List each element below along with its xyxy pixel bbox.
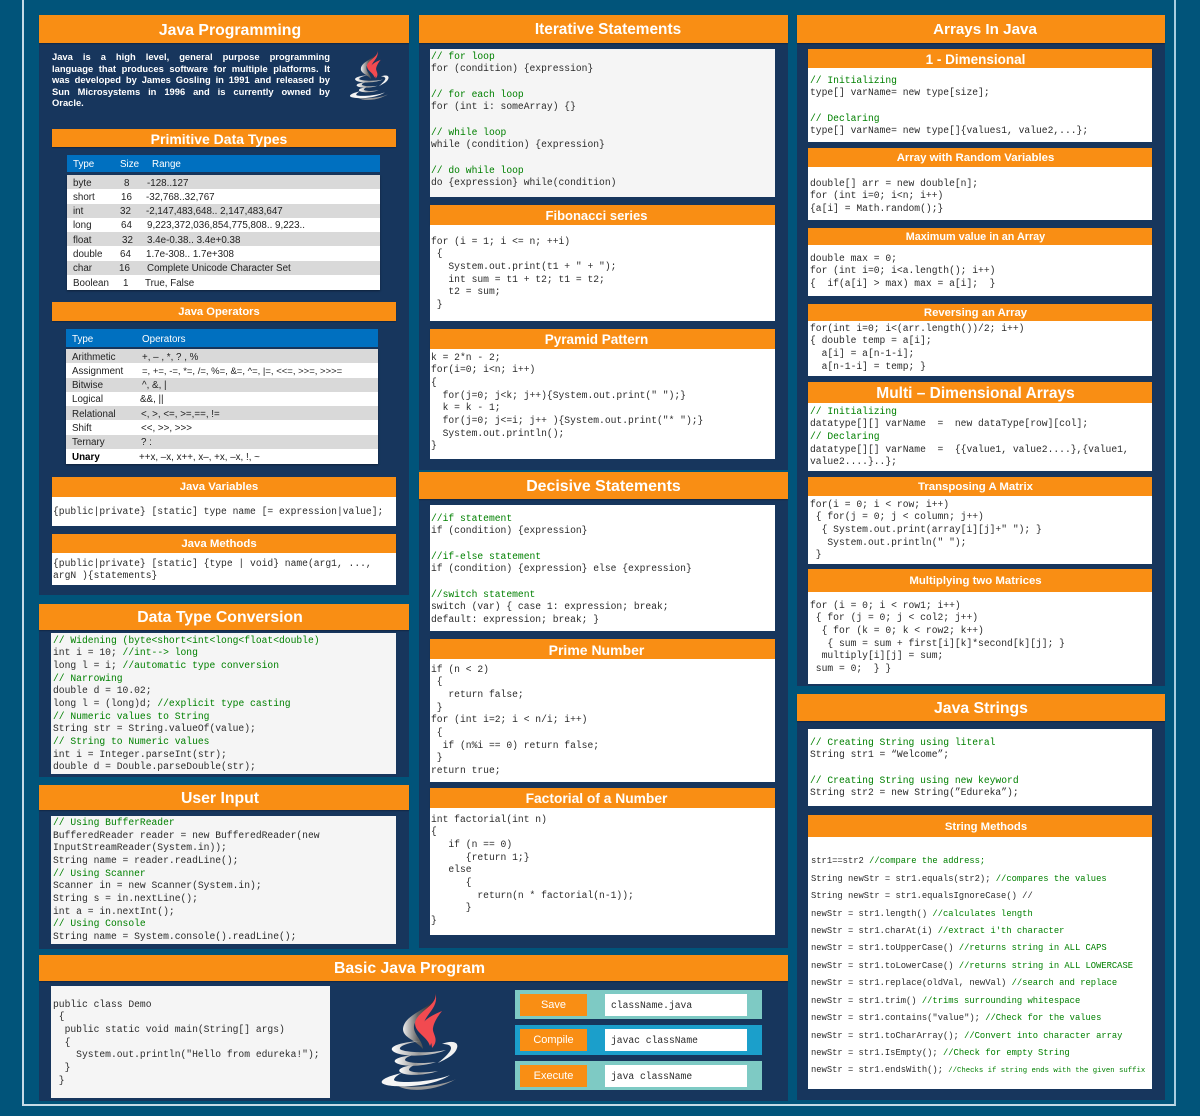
code: variables: {public|private} [static] type name [= expression|value]; (53, 506, 383, 516)
section: Multi – Dimensional Arrays (808, 382, 1152, 471)
code: user input: // Using BufferReader BufferedReader reader = new BufferedReader(new InputStreamReader(System.in)); String name = reader.readLine(); // Using Scanner Scanner in = new Scanner(System.in); String s = in.nextLine(); int a = in.nextInt(); // Using Console String name = System.console().readLine(); (53, 817, 320, 942)
command: execute: java className (611, 1071, 692, 1082)
code: transposing: for(i = 0; i < row; i++) { for(j = 0; j < column; j++) { System.out.print(array[i][j]+" "); } System.out.println(" "); } (810, 499, 1042, 560)
table: data types: Boolean (73, 278, 109, 289)
command: compile: javac className (611, 1035, 698, 1046)
table header: data types (67, 155, 380, 172)
table header: operators (66, 329, 378, 347)
code: methods: {public|private} [static] {type | void} name(arg1, ..., argN ){statements} (53, 558, 372, 581)
code: pyramid: k = 2*n - 2; for(i=0; i<n; i++) { for(j=0; j<k; j++){System.out.print(" ");} k = k - 1; for(j=0; j<=i; j++ ){System.out.print("* ");} System.out.println(); } (431, 352, 703, 451)
table: data types: 32 (120, 206, 131, 217)
heading: Basic Java Program (39, 955, 788, 981)
text block: introduction: Oracle. (52, 97, 84, 108)
button: Compile (520, 1029, 587, 1051)
row: Compile (515, 1025, 762, 1055)
panel: Decisive Statements (419, 472, 788, 948)
code: reversing: for(int i=0; i<(arr.length())/2; i++) { double temp = a[i]; a[i] = a[n-1-i]; a[n-1-i] = temp; } (810, 323, 1024, 372)
heading: Basic Java Program: Basic Java Program (334, 960, 485, 977)
heading: Multiplying two Matrices: Multiplying two Matrices (909, 575, 1042, 587)
section: Pyramid Pattern (430, 329, 775, 459)
section: Factorial of a Number (430, 788, 775, 935)
panel: Arrays In Java (797, 15, 1165, 686)
table: operators (66, 349, 378, 464)
heading: Iterative Statements: Iterative Statements (535, 21, 681, 38)
code: maximum: double max = 0; for (int i=0; i<a.length(); i++) { if(a[i] > max) max = a[i]; } (810, 253, 995, 289)
table: operators: <<, >>, >>> (141, 423, 192, 434)
section: Fibonacci series (430, 205, 775, 321)
heading: Java Operators: Java Operators (178, 306, 260, 318)
section: Primitive Data Types (52, 129, 396, 292)
text block: introduction: language that produces software for multiple platforms. It (52, 63, 330, 74)
code: random (808, 167, 1152, 220)
code: multiplying (808, 592, 1152, 684)
heading: Java Methods (52, 534, 396, 553)
code: string methods: str1==str2 //compare the address; String newStr = str1.equals(str2); //compares the values String newStr = str1.equalsIgnoreCase() // newStr = str1.length() //calculates length newStr = str1.charAt(i) //extract i'th character newStr = str1.toUpperCase() //returns string in ALL CAPS newStr = str1.toLowerCase() //returns string in ALL LOWERCASE newStr = str1.replace(oldVal, newVal) //search and replace newStr = str1.trim() //trims surrounding whitespace newStr = str1.contains("value"); //Check for the values newStr = str1.toCharArray(); //Convert into character array newStr = str1.IsEmpty(); //Check for empty String newStr = str1.endsWith(); //Checks if string ends with the given suffix (811, 856, 1145, 1075)
text block: introduction (52, 51, 330, 108)
table: operators: ? : (141, 437, 152, 448)
code: prime (430, 659, 775, 782)
table: data types: 64 (120, 249, 131, 260)
button: Execute: Execute (534, 1070, 573, 1082)
command: save: className.java (611, 1000, 692, 1011)
table header: operators: Type (72, 334, 93, 344)
heading: Transposing A Matrix: Transposing A Matrix (918, 481, 1033, 493)
panel: Java Programming (39, 15, 409, 595)
text block: introduction: was developed by James Gosling in 1991 and released by (52, 74, 330, 85)
table: data types: True, False (145, 278, 194, 289)
code: methods (52, 553, 396, 585)
button: Compile: Compile (533, 1034, 574, 1046)
table header: data types: Range (152, 159, 181, 170)
table: data types: -128..127 (147, 178, 188, 188)
table: data types: 8 (124, 178, 129, 188)
code: loops (430, 49, 775, 197)
section: Array with Random Variables (808, 148, 1152, 220)
table: operators: Relational (72, 409, 116, 420)
heading: String Methods: String Methods (945, 821, 1027, 833)
code: transposing (808, 496, 1152, 564)
table: data types: 64 (121, 220, 132, 231)
heading: Maximum value in an Array: Maximum value in an Array (906, 231, 1045, 243)
icon: large java logo (382, 994, 458, 1090)
code: conditionals (430, 505, 775, 631)
table: data types: float (73, 235, 92, 246)
row: Execute (515, 1061, 762, 1090)
button: Execute (520, 1065, 587, 1087)
table: data types (67, 175, 380, 290)
table: data types: 3.4e-0.38.. 3.4e+0.38 (147, 235, 240, 246)
heading: Java Programming (39, 15, 409, 43)
text block: introduction: Sun Microsystems in 1996 and is currently owned by (52, 86, 330, 97)
code: demo program: public class Demo { public static void main(String[] args) { System.out.println("Hello from edureka!"); } } (53, 999, 320, 1086)
table: operators: Arithmetic (72, 352, 116, 362)
table: operators: Bitwise (72, 380, 103, 391)
heading: Java Methods: Java Methods (181, 538, 257, 550)
code: conditionals: //if statement if (condition) {expression} //if-else statement if (condition) {expression} else {expression} //switch statement switch (var) { case 1: expression; break; default: expression; break; } (431, 513, 692, 625)
heading: User Input: User Input (181, 790, 259, 807)
section: Java Methods (52, 534, 396, 585)
table: data types: double (73, 249, 102, 260)
panel: Java Strings (797, 694, 1165, 1100)
table: data types: byte (73, 178, 92, 188)
code: random: double[] arr = new double[n]; for (int i=0; i<n; i++) {a[i] = Math.random();} (810, 178, 978, 214)
heading: Array with Random Variables (808, 148, 1152, 167)
code: creating strings: // Creating String using literal String str1 = “Welcome”; // Creating String using new keyword String str2 = new String(”Edureka”); (810, 737, 1019, 798)
heading: Java Strings: Java Strings (934, 700, 1028, 717)
command: compile (605, 1029, 747, 1051)
code: one-dimensional: // Initializing type[] varName= new type[size]; // Declaring type[] varName= new type[]{values1, value2,...}; (810, 75, 1088, 136)
table: data types: char (73, 263, 92, 274)
table: operators: +, – , *, ? , % (142, 352, 198, 362)
heading: Java Operators (52, 302, 396, 321)
code: factorial: int factorial(int n) { if (n == 0) {return 1;} else { return(n * factorial(n-1)); } } (431, 814, 634, 926)
table: data types: short (73, 192, 95, 203)
code: variables (52, 497, 396, 526)
code: loops: // for loop for (condition) {expression} // for each loop for (int i: someArray) {} // while loop while (condition) {expression} // do while loop do {expression} while(condition) (431, 51, 616, 188)
section: Prime Number (430, 639, 775, 782)
table: operators: Logical (72, 394, 103, 405)
table: data types: 9,223,372,036,854,775,808.. 9,223.. (147, 220, 305, 231)
heading: Arrays In Java (797, 15, 1165, 43)
button: Save (520, 994, 587, 1016)
table: operators: ^, &, | (142, 380, 167, 391)
text block: introduction: Java is a high level, general purpose programming (52, 51, 330, 62)
heading: Prime Number: Prime Number (549, 642, 644, 658)
table: data types: 16 (121, 192, 132, 203)
table: data types: int (73, 206, 83, 217)
table: data types: long (73, 220, 92, 231)
heading: Decisive Statements: Decisive Statements (526, 478, 681, 495)
section: String Methods (808, 815, 1152, 1089)
section: Java Operators (52, 302, 396, 466)
code: fibonacci (430, 225, 775, 321)
panel: Iterative Statements (419, 15, 788, 470)
heading: Pyramid Pattern: Pyramid Pattern (545, 332, 648, 347)
section: Transposing A Matrix (808, 477, 1152, 564)
heading: Arrays In Java: Arrays In Java (933, 21, 1037, 38)
table header: data types: Type (73, 159, 94, 170)
heading: Transposing A Matrix (808, 477, 1152, 496)
panel: Basic Java Program (39, 955, 788, 1101)
heading: Fibonacci series (430, 205, 775, 225)
table: operators: =, +=, -=, *=, /=, %=, &=, ^=, |=, <<=, >>=, >>>= (142, 366, 342, 377)
heading: Factorial of a Number (430, 788, 775, 808)
section: 1 - Dimensional (808, 49, 1152, 142)
button: Save: Save (541, 999, 566, 1011)
table: operators: Ternary (72, 437, 105, 448)
code: creating strings (808, 729, 1152, 806)
section: Maximum value in an Array (808, 228, 1152, 296)
heading: 1 - Dimensional (808, 49, 1152, 68)
heading: Maximum value in an Array (808, 228, 1152, 245)
heading: Primitive Data Types (52, 129, 396, 147)
heading: Pyramid Pattern (430, 329, 775, 349)
heading: Primitive Data Types: Primitive Data Types (151, 131, 287, 147)
heading: Array with Random Variables: Array with Random Variables (897, 152, 1054, 164)
code: multi-dimensional: // Initializing datatype[][] varName = new dataType[row][col]; // Declaring datatype[][] varName = {{value1, value2....},{value1, value2....}..}; (810, 406, 1129, 467)
heading: Java Variables: Java Variables (180, 481, 258, 493)
table: operators: Assignment (72, 366, 123, 377)
command: execute (605, 1065, 747, 1087)
heading: Multiplying two Matrices (808, 569, 1152, 592)
table: data types: -32,768..32,767 (146, 192, 215, 203)
table header: operators: Operators (142, 334, 186, 344)
panel: User Input (39, 785, 409, 949)
table: operators: ++x, –x, x++, x–, +x, –x, !, ~ (139, 452, 260, 463)
heading: Multi – Dimensional Arrays (808, 382, 1152, 403)
section: Multiplying two Matrices (808, 569, 1152, 684)
table: data types: 1 (123, 278, 128, 289)
table: operators: <, >, <=, >=,==, != (141, 409, 220, 420)
table: data types: 32 (122, 235, 133, 246)
heading: Fibonacci series: Fibonacci series (546, 208, 647, 223)
section: Reversing an Array (808, 304, 1152, 376)
heading: User Input (39, 785, 409, 810)
table header: data types: Size (120, 159, 139, 170)
heading: 1 - Dimensional: 1 - Dimensional (926, 52, 1025, 67)
heading: Java Variables (52, 477, 396, 497)
heading: Prime Number (430, 639, 775, 659)
heading: String Methods (808, 815, 1152, 837)
heading: Reversing an Array: Reversing an Array (924, 307, 1027, 319)
heading: Data Type Conversion (39, 604, 409, 630)
command: save (605, 994, 747, 1016)
code: factorial (430, 808, 775, 935)
row: Save (515, 990, 762, 1019)
heading: Data Type Conversion: Data Type Conversion (137, 609, 303, 626)
code: one-dimensional (808, 68, 1152, 142)
heading: Decisive Statements (419, 472, 788, 499)
section: Java Variables (52, 477, 396, 526)
panel: Data Type Conversion (39, 604, 409, 777)
heading: Reversing an Array (808, 304, 1152, 321)
table: operators: &&, || (140, 394, 164, 405)
table: data types: Complete Unicode Character Set (147, 263, 291, 274)
code: conversion: // Widening (byte<short<int<long<float<double) int i = 10; //int--> long long l = i; //automatic type conversion // Narrowing double d = 10.02; long l = (long)d; //explicit type casting // Numeric values to String String str = String.valueOf(value); // String to Numeric values int i = Integer.parseInt(str); double d = Double.parseDouble(str); (53, 635, 320, 772)
code: prime: if (n < 2) { return false; } for (int i=2; i < n/i; i++) { if (n%i == 0) return false; } return true; (431, 664, 599, 776)
code: fibonacci: for (i = 1; i <= n; ++i) { System.out.print(t1 + " + "); int sum = t1 + t2; t1 = t2; t2 = sum; } (431, 236, 616, 310)
heading: Java Strings (797, 694, 1165, 721)
heading: Java Programming: Java Programming (159, 22, 301, 39)
heading: Iterative Statements (419, 15, 788, 43)
icon: small java logo (350, 50, 389, 100)
code: reversing (808, 321, 1152, 376)
heading: Multi – Dimensional Arrays: Multi – Dimensional Arrays (876, 385, 1075, 402)
table: operators: Shift (72, 423, 92, 434)
heading: Factorial of a Number: Factorial of a Number (526, 791, 667, 806)
code: multiplying: for (i = 0; i < row1; i++) { for (j = 0; j < col2; j++) { for (k = 0; k < row2; k++) { sum = sum + first[i][k]*second[k][j]; } multiply[i][j] = sum; sum = 0; } } (810, 600, 1065, 674)
code: maximum (808, 245, 1152, 296)
table: data types: -2,147,483,648.. 2,147,483,647 (146, 206, 283, 217)
table: operators: Unary (72, 452, 100, 463)
table: data types: 1.7e-308.. 1.7e+308 (146, 249, 234, 260)
table: data types: 16 (119, 263, 130, 274)
